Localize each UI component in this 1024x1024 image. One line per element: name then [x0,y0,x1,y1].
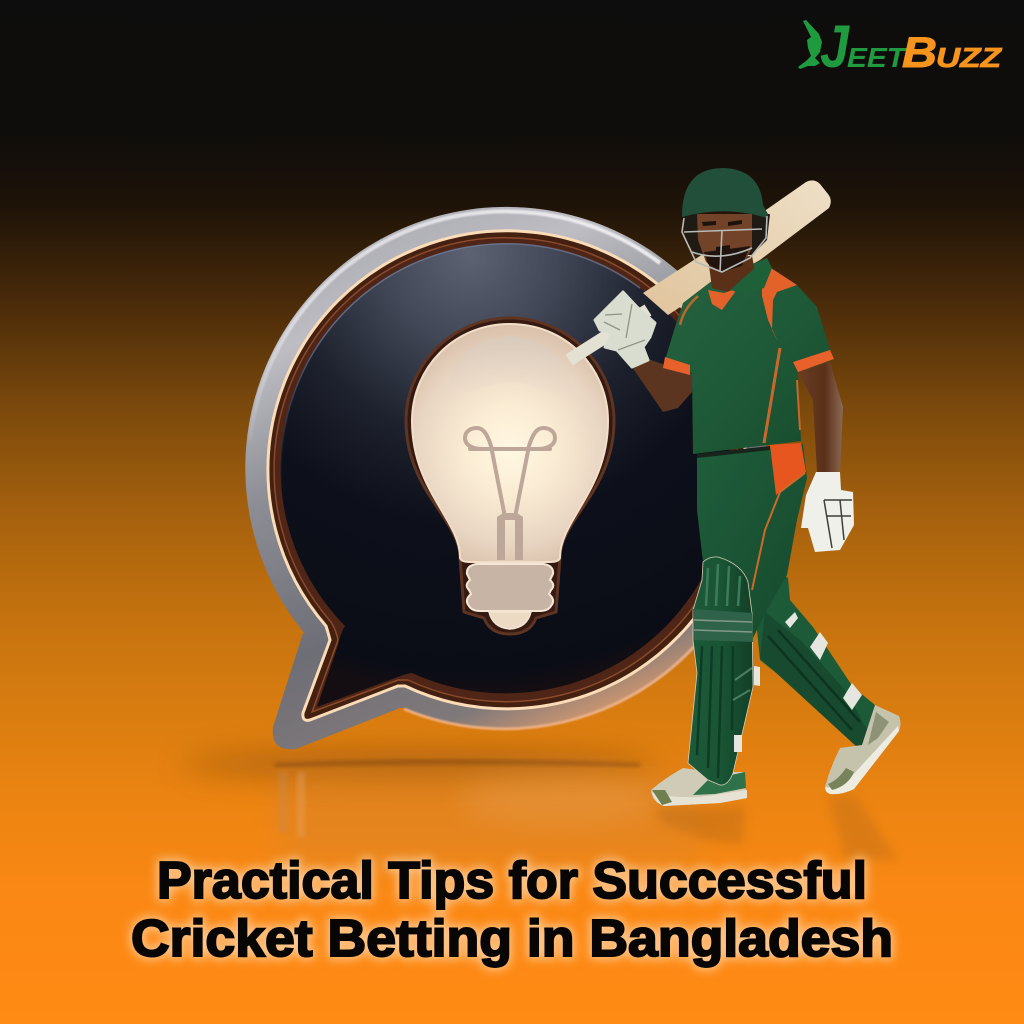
beard [704,246,750,272]
shirt piping [764,348,780,443]
title glow: Practical Tips for Successful [157,852,867,910]
title line 1: Practical Tips for Successful [157,852,867,910]
trousers [697,444,807,640]
left arm [632,358,693,412]
top glove [595,292,655,367]
floor shadow and reflection [180,748,898,862]
bulb glass [412,324,608,562]
logo word: Buzz: UZZ [936,42,1002,73]
back leg [755,565,875,748]
bubble top highlight [250,211,660,440]
logo word: Jeet [820,13,908,80]
trouser piping [752,473,805,590]
title glow: Cricket Betting in Bangladesh [131,910,893,968]
neck [708,256,756,292]
bat blade [643,180,831,315]
speech bubble [245,207,767,749]
shirt orange shoulder [762,268,797,342]
eyes and nose [702,220,742,251]
bubble copper ring [268,231,746,720]
bubble bottom glow [404,640,700,729]
logo word: Jeet: EET [847,42,908,73]
icon: batsman silhouette [798,20,822,69]
helmet [682,168,768,218]
title [131,852,893,968]
bubble blue rim light [281,244,640,490]
waistband [697,446,770,458]
bubble chrome outer rim [245,207,767,749]
cricket player [569,168,900,806]
back shoe [825,705,900,794]
right sleeve trim [793,350,834,372]
bulb highlight [448,336,572,405]
right arm [798,362,843,472]
bulb filament [465,428,555,512]
bulb halo [406,318,614,634]
bubble dark glass face [281,243,731,707]
bottom glove [801,472,854,552]
trouser orange panel [770,443,806,495]
logo: JeetBuzz [798,13,1002,80]
logo word: Jeet: J [820,13,850,80]
title glow [131,852,893,968]
logo word: Buzz [902,29,1002,77]
bulb filament stem [497,513,523,560]
helmet side pads [683,214,770,255]
bubble inner brown line [274,238,738,712]
bat handle [569,310,648,360]
title line 2: Cricket Betting in Bangladesh [131,910,893,968]
icon: light bulb [406,318,614,634]
front leg pad [688,557,760,785]
front shoe [651,768,747,806]
helmet grille [682,216,767,272]
left sleeve trim [663,357,690,375]
back leg pad [760,612,870,748]
shirt [663,258,833,454]
bulb screw base [467,564,553,611]
shirt collar [708,288,738,310]
left shoulder piping [680,296,698,325]
logo word: Buzz: B [902,29,937,77]
bulb tip [489,612,531,629]
face [697,214,752,272]
